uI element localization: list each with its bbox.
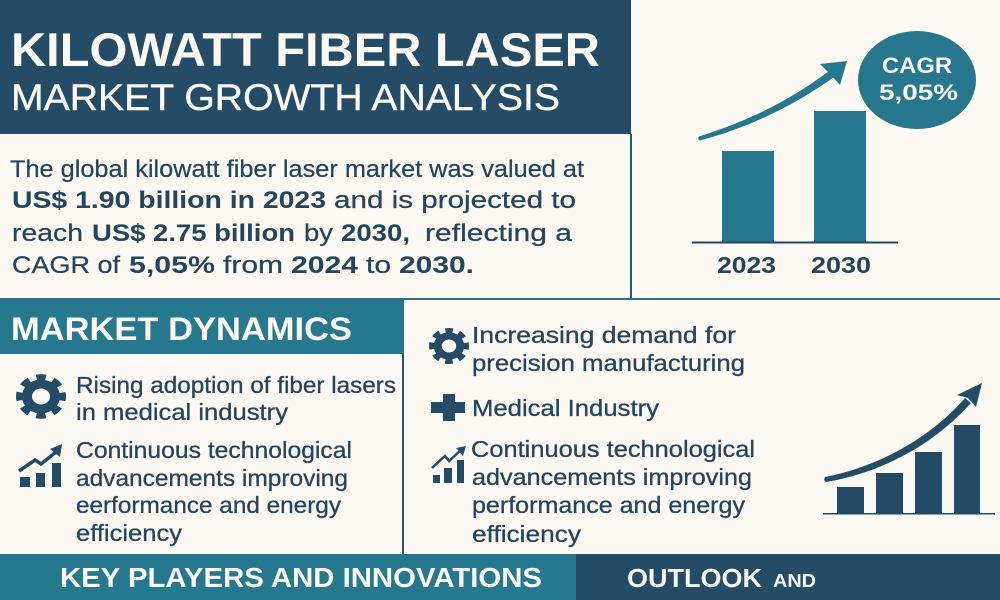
text: continuous advancements — [76, 437, 352, 546]
icon: gear — [20, 378, 62, 415]
label 2023: 2023 — [717, 252, 776, 278]
heading: market dynamics — [0, 300, 404, 354]
bar 2030 — [814, 111, 866, 242]
title line 1: KILOWATT FIBER LASER — [11, 23, 600, 76]
intro paragraph: US$ 2.75 billion — [92, 220, 295, 247]
intro paragraph: from — [223, 252, 283, 279]
banner: outlook and — [576, 554, 1000, 600]
text: continuous advancements: performance and energy — [472, 492, 746, 518]
intro paragraph: reach — [12, 220, 83, 247]
intro paragraph: 2024 — [291, 252, 359, 279]
text: continuous advancements: efficiency — [76, 520, 183, 546]
divider: middle vertical — [402, 354, 404, 554]
text: continuous advancements: advancements improving — [472, 464, 752, 490]
text: rising adoption: Rising adoption of fiber lasers — [76, 372, 396, 398]
text: continuous advancements: Continuous technological — [471, 436, 755, 462]
callout: CAGR badge: CAGR — [882, 53, 952, 78]
text: increasing demand: Increasing demand for — [472, 322, 736, 348]
arrow: growth trend — [698, 61, 847, 140]
text: continuous advancements: efficiency — [472, 521, 582, 547]
divider: horizontal — [0, 298, 1000, 300]
intro paragraph: CAGR of — [12, 252, 120, 279]
text: continuous advancements: eerformance and energy — [76, 492, 342, 518]
divider: top vertical — [630, 134, 632, 300]
icon: medical cross — [431, 394, 465, 421]
text: increasing demand — [472, 322, 745, 376]
intro paragraph — [10, 156, 584, 279]
chart: rising bars with arrow — [823, 383, 995, 514]
intro paragraph: to — [366, 252, 391, 279]
intro paragraph: 5,05% — [129, 252, 215, 279]
text: continuous advancements — [471, 436, 755, 547]
banner: outlook and: OUTLOOK — [627, 563, 762, 593]
bar 2023 — [722, 151, 774, 242]
intro paragraph: The global kilowatt fiber laser market was valued at — [10, 156, 584, 183]
title banner — [0, 0, 631, 134]
intro paragraph: reflecting a — [425, 220, 573, 247]
callout: CAGR badge — [858, 31, 976, 129]
panel: right dynamics list — [431, 322, 755, 547]
intro paragraph: US$ 1.90 billion in 2023 — [12, 187, 326, 214]
banner: key players and innovations — [0, 554, 576, 600]
text: rising adoption: in medical industry — [76, 399, 289, 425]
icon: growth chart small — [432, 446, 466, 483]
panel: left dynamics list — [19, 372, 396, 546]
text: rising adoption — [76, 372, 396, 425]
label 2030: 2030 — [811, 252, 871, 278]
text: continuous advancements: Continuous technological — [76, 437, 352, 463]
text: medical industry: Medical Industry — [472, 395, 660, 421]
icon: gear — [432, 331, 466, 361]
title line 2: MARKET GROWTH ANALYSIS — [11, 77, 560, 118]
callout: CAGR badge: 5,05% — [879, 80, 958, 105]
intro paragraph: 2030. — [399, 252, 474, 279]
text: increasing demand: precision manufacturing — [472, 350, 745, 376]
banner: outlook and: AND — [773, 571, 816, 591]
intro paragraph: and is projected to — [334, 187, 576, 214]
bar chart: 2023 vs 2030 — [692, 111, 898, 278]
intro paragraph: by — [304, 220, 333, 247]
banner: key players and innovations: KEY PLAYERS AND INNOVATIONS — [60, 562, 542, 593]
icon: growth chart small — [19, 444, 62, 487]
intro paragraph: 2030, — [341, 220, 410, 247]
heading: market dynamics: MARKET DYNAMICS — [11, 311, 352, 347]
text: continuous advancements: advancements improving — [76, 465, 348, 491]
